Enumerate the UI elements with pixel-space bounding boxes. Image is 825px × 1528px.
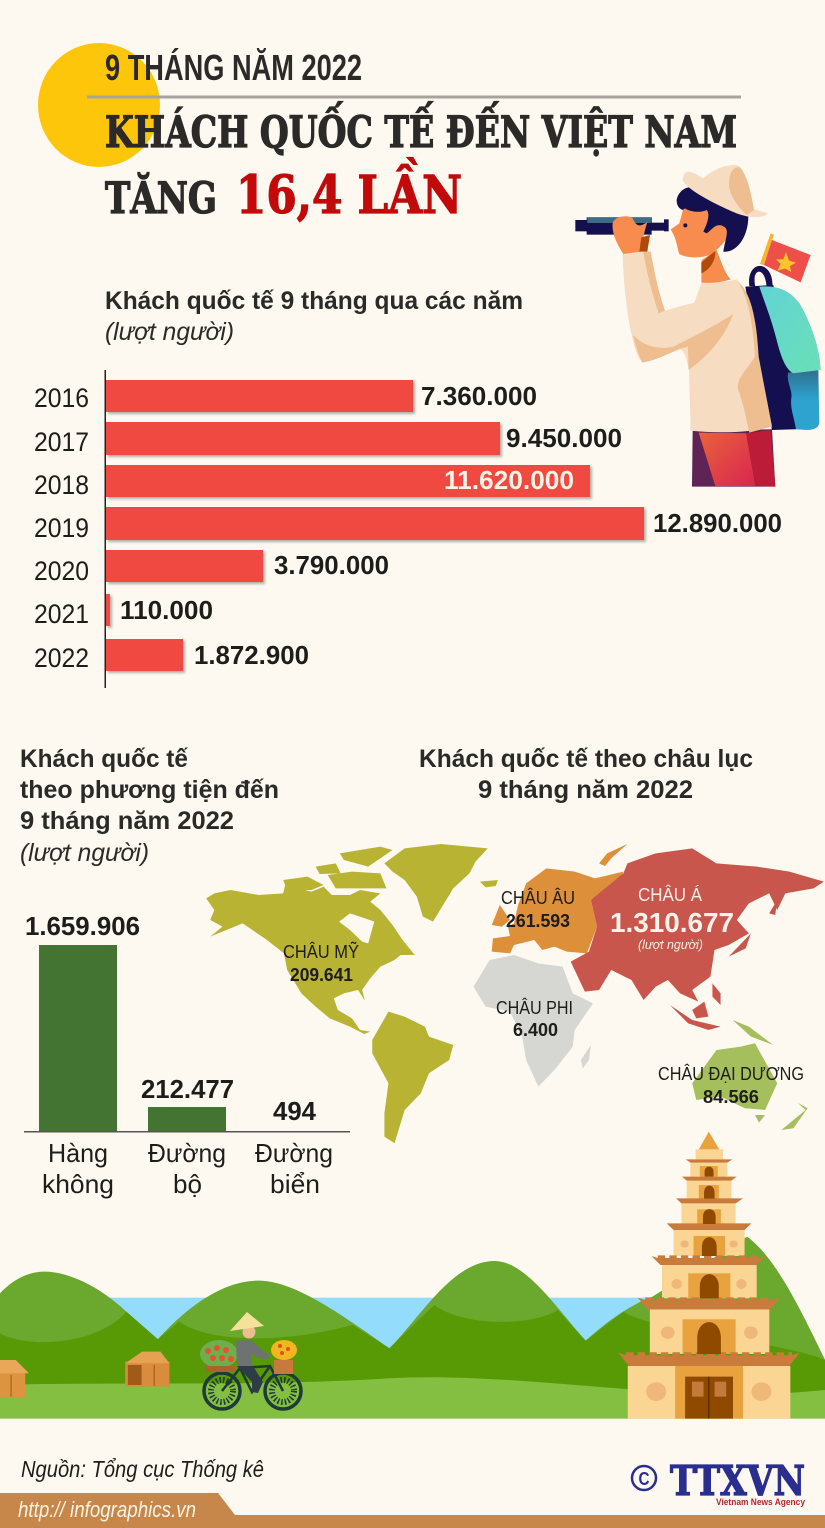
illustration: tourist with binoculars xyxy=(575,165,821,487)
Africa xyxy=(474,955,593,1087)
year labels: 2021 xyxy=(34,599,89,629)
map labels xyxy=(283,885,804,1107)
Europe xyxy=(492,844,627,953)
year labels xyxy=(34,383,89,673)
transport heading: 9 tháng năm 2022 xyxy=(20,807,234,835)
transport heading: (lượt người) xyxy=(20,839,149,867)
icon: yellow sun xyxy=(38,43,160,167)
bar values: 7.360.000 xyxy=(421,381,537,411)
label: Châu Phi xyxy=(496,998,573,1040)
year labels: 2019 xyxy=(34,513,89,543)
label: Châu Á: CHÂU Á xyxy=(638,885,702,905)
bar values: 11.620.000 xyxy=(444,465,574,495)
bar chart heading: Khách quốc tế 9 tháng qua các năm xyxy=(105,287,523,315)
year labels: 2022 xyxy=(34,643,89,673)
copyright mark xyxy=(632,1466,656,1490)
bar values: 12.890.000 xyxy=(653,508,782,538)
label: Châu Phi: CHÂU PHI xyxy=(496,998,573,1018)
column chart: transport xyxy=(24,911,350,1199)
world map xyxy=(206,844,824,1143)
bar chart unit: (lượt người) xyxy=(105,318,234,346)
logo: TTXVN: Vietnam News Agency xyxy=(716,1497,806,1508)
Oceania xyxy=(692,1020,808,1130)
copyright mark: C xyxy=(638,1469,650,1489)
Hudson Bay xyxy=(339,913,374,943)
transport heading xyxy=(20,745,279,867)
column chart: transport: Đường xyxy=(148,1138,226,1168)
bar values: 1.872.900 xyxy=(194,640,309,670)
subtitle: 9 tháng năm 2022: 9 THÁNG NĂM 2022 xyxy=(105,47,362,88)
year labels: 2017 xyxy=(34,427,89,457)
shirt xyxy=(623,252,772,433)
column chart: transport: bộ xyxy=(173,1169,202,1199)
column chart: transport: biển xyxy=(270,1169,320,1199)
flag xyxy=(760,233,811,282)
bar chart: yearly visitors xyxy=(34,370,782,688)
label: Châu Âu: CHÂU ÂU xyxy=(501,888,575,908)
legs xyxy=(692,429,775,487)
footer url: http:// infographics.vn xyxy=(18,1497,196,1522)
bar values xyxy=(120,381,782,670)
ground xyxy=(0,1377,825,1419)
logo: TTXVN xyxy=(632,1457,806,1508)
neck and head xyxy=(671,165,768,283)
label: Châu Mỹ xyxy=(283,941,359,985)
column chart: transport: 494 xyxy=(273,1096,317,1126)
transport heading: theo phương tiện đến xyxy=(20,776,279,804)
hand xyxy=(613,216,647,254)
main title line 2: TĂNG xyxy=(105,172,217,224)
label: Châu Âu xyxy=(501,888,575,931)
label: Châu Á: (lượt người) xyxy=(638,937,703,952)
temple xyxy=(618,1132,800,1419)
title block xyxy=(87,47,741,226)
Americas xyxy=(206,844,498,1143)
flower bunch back xyxy=(200,1340,238,1372)
continent heading: 9 tháng năm 2022 xyxy=(478,776,693,804)
bar values: 110.000 xyxy=(120,595,213,625)
bar values: 3.790.000 xyxy=(274,550,389,580)
label: Châu Phi: 6.400 xyxy=(513,1020,558,1040)
source: Nguồn: Tổng cục Thống kê xyxy=(21,1456,264,1482)
Asia xyxy=(571,848,824,1030)
cyclist selling flowers xyxy=(200,1312,301,1409)
column chart: transport: Hàng xyxy=(48,1138,108,1168)
footer band xyxy=(0,1493,825,1528)
continent heading xyxy=(419,745,753,804)
year labels: 2018 xyxy=(34,470,89,500)
rider xyxy=(230,1312,270,1393)
bars xyxy=(106,380,644,671)
label: Châu Âu: 261.593 xyxy=(506,911,570,931)
label: Châu Á: 1.310.677 xyxy=(610,907,734,938)
label: Châu Mỹ: 209.641 xyxy=(290,965,353,985)
house right xyxy=(125,1352,169,1387)
transport heading: Khách quốc tế xyxy=(20,745,188,773)
mountains xyxy=(0,1237,825,1397)
landscape xyxy=(0,1132,825,1419)
year labels: 2016 xyxy=(34,383,89,413)
column chart: transport: 212.477 xyxy=(141,1074,234,1104)
label: Châu Đại Dương xyxy=(658,1064,804,1107)
label: Châu Mỹ: CHÂU MỸ xyxy=(283,941,359,962)
bar values: 9.450.000 xyxy=(506,423,622,453)
label: Châu Á xyxy=(610,885,734,952)
column chart: transport: Đường xyxy=(255,1138,333,1168)
binoculars xyxy=(575,217,669,235)
highlighted 16,4 lần: 16,4 LẦN xyxy=(236,157,462,226)
label: Châu Đại Dương: CHÂU ĐẠI DƯƠNG xyxy=(658,1064,804,1084)
continent heading: Khách quốc tế theo châu lục xyxy=(419,745,753,773)
bicycle wheels xyxy=(204,1366,301,1409)
flower basket front xyxy=(271,1340,297,1374)
column chart: transport: không xyxy=(42,1169,114,1199)
label: Châu Đại Dương: 84.566 xyxy=(703,1087,759,1107)
backpack xyxy=(745,266,821,430)
house left xyxy=(0,1360,29,1397)
year labels: 2020 xyxy=(34,556,89,586)
river xyxy=(0,1298,684,1371)
column chart: transport: 1.659.906 xyxy=(25,911,140,941)
